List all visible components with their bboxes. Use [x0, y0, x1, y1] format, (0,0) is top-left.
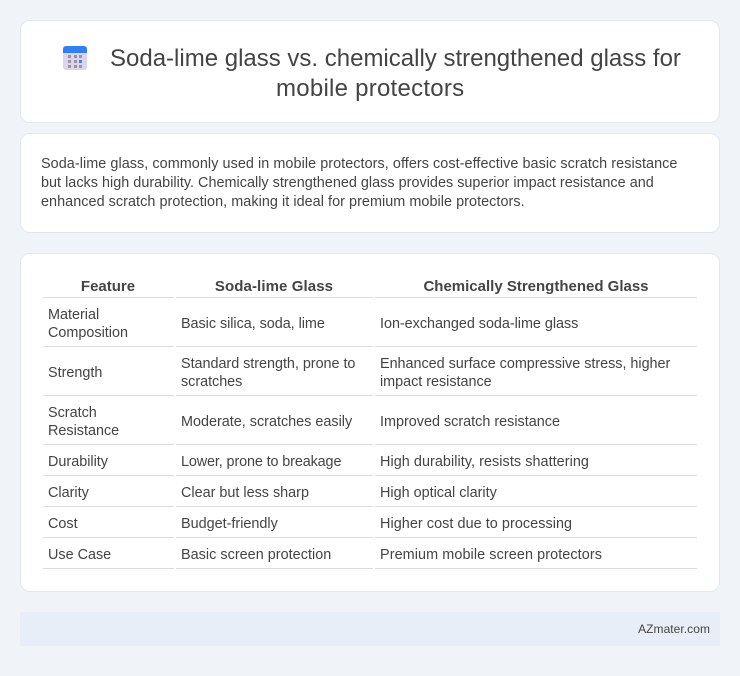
comparison table: High durability, resists shattering — [380, 454, 589, 470]
table header: Chemically Strengthened Glass: Chemically Strengthened Glass — [423, 278, 649, 295]
table header: Feature: Feature — [81, 278, 135, 295]
comparison table: Ion-exchanged soda-lime glass — [380, 316, 578, 332]
summary paragraph: Soda-lime glass, commonly used in mobile protectors, offers cost-effective basic scratch resistance — [41, 156, 677, 172]
comparison table: Moderate, scratches easily — [181, 414, 352, 430]
row: Material Composition: Material — [48, 307, 99, 323]
row: Use Case: Use Case — [48, 547, 111, 563]
row: Clarity: Clarity — [48, 485, 89, 501]
summary paragraph — [41, 156, 677, 210]
row: Material Composition: Composition — [48, 325, 128, 341]
title: mobile protectors — [276, 74, 464, 102]
comparison table: Basic silica, soda, lime — [181, 316, 325, 332]
footer bar — [20, 612, 720, 646]
comparison table: Standard strength, prone to — [181, 356, 355, 372]
panel: comparison table card — [20, 253, 720, 592]
comparison table: Higher cost due to processing — [380, 516, 572, 532]
summary paragraph: enhanced scratch protection, making it ideal for premium mobile protectors. — [41, 194, 525, 210]
comparison table: Clear but less sharp — [181, 485, 309, 501]
panel: summary text card — [20, 133, 720, 233]
panel: title card — [20, 20, 720, 123]
row: Durability: Durability — [48, 454, 108, 470]
row: Strength: Strength — [48, 365, 102, 381]
footer source label: AZmater.com — [638, 622, 710, 636]
summary paragraph: but lacks high durability. Chemically strengthened glass provides superior impact resistance and — [41, 175, 654, 191]
row: Scratch Resistance — [48, 405, 119, 439]
title: Soda-lime glass vs. chemically strengthened glass for — [110, 45, 681, 72]
comparison table: Budget-friendly — [181, 516, 278, 532]
row: Cost: Cost — [48, 516, 78, 532]
comparison table: Enhanced surface compressive stress, higher — [380, 356, 670, 372]
comparison table: Lower, prone to breakage — [181, 454, 341, 470]
comparison table: Premium mobile screen protectors — [380, 547, 602, 563]
table header: Soda-lime Glass: Soda-lime Glass — [215, 278, 333, 295]
comparison table: Basic screen protection — [181, 547, 331, 563]
comparison table: Improved scratch resistance — [380, 414, 560, 430]
row: Material Composition — [48, 307, 128, 341]
icon: calendar — [63, 46, 87, 70]
comparison table: impact resistance — [380, 374, 492, 390]
comparison table: scratches — [181, 374, 242, 390]
comparison table: High optical clarity — [380, 485, 497, 501]
row: Scratch Resistance: Resistance — [48, 423, 119, 439]
row: Scratch Resistance: Scratch — [48, 405, 97, 421]
title — [110, 45, 681, 102]
